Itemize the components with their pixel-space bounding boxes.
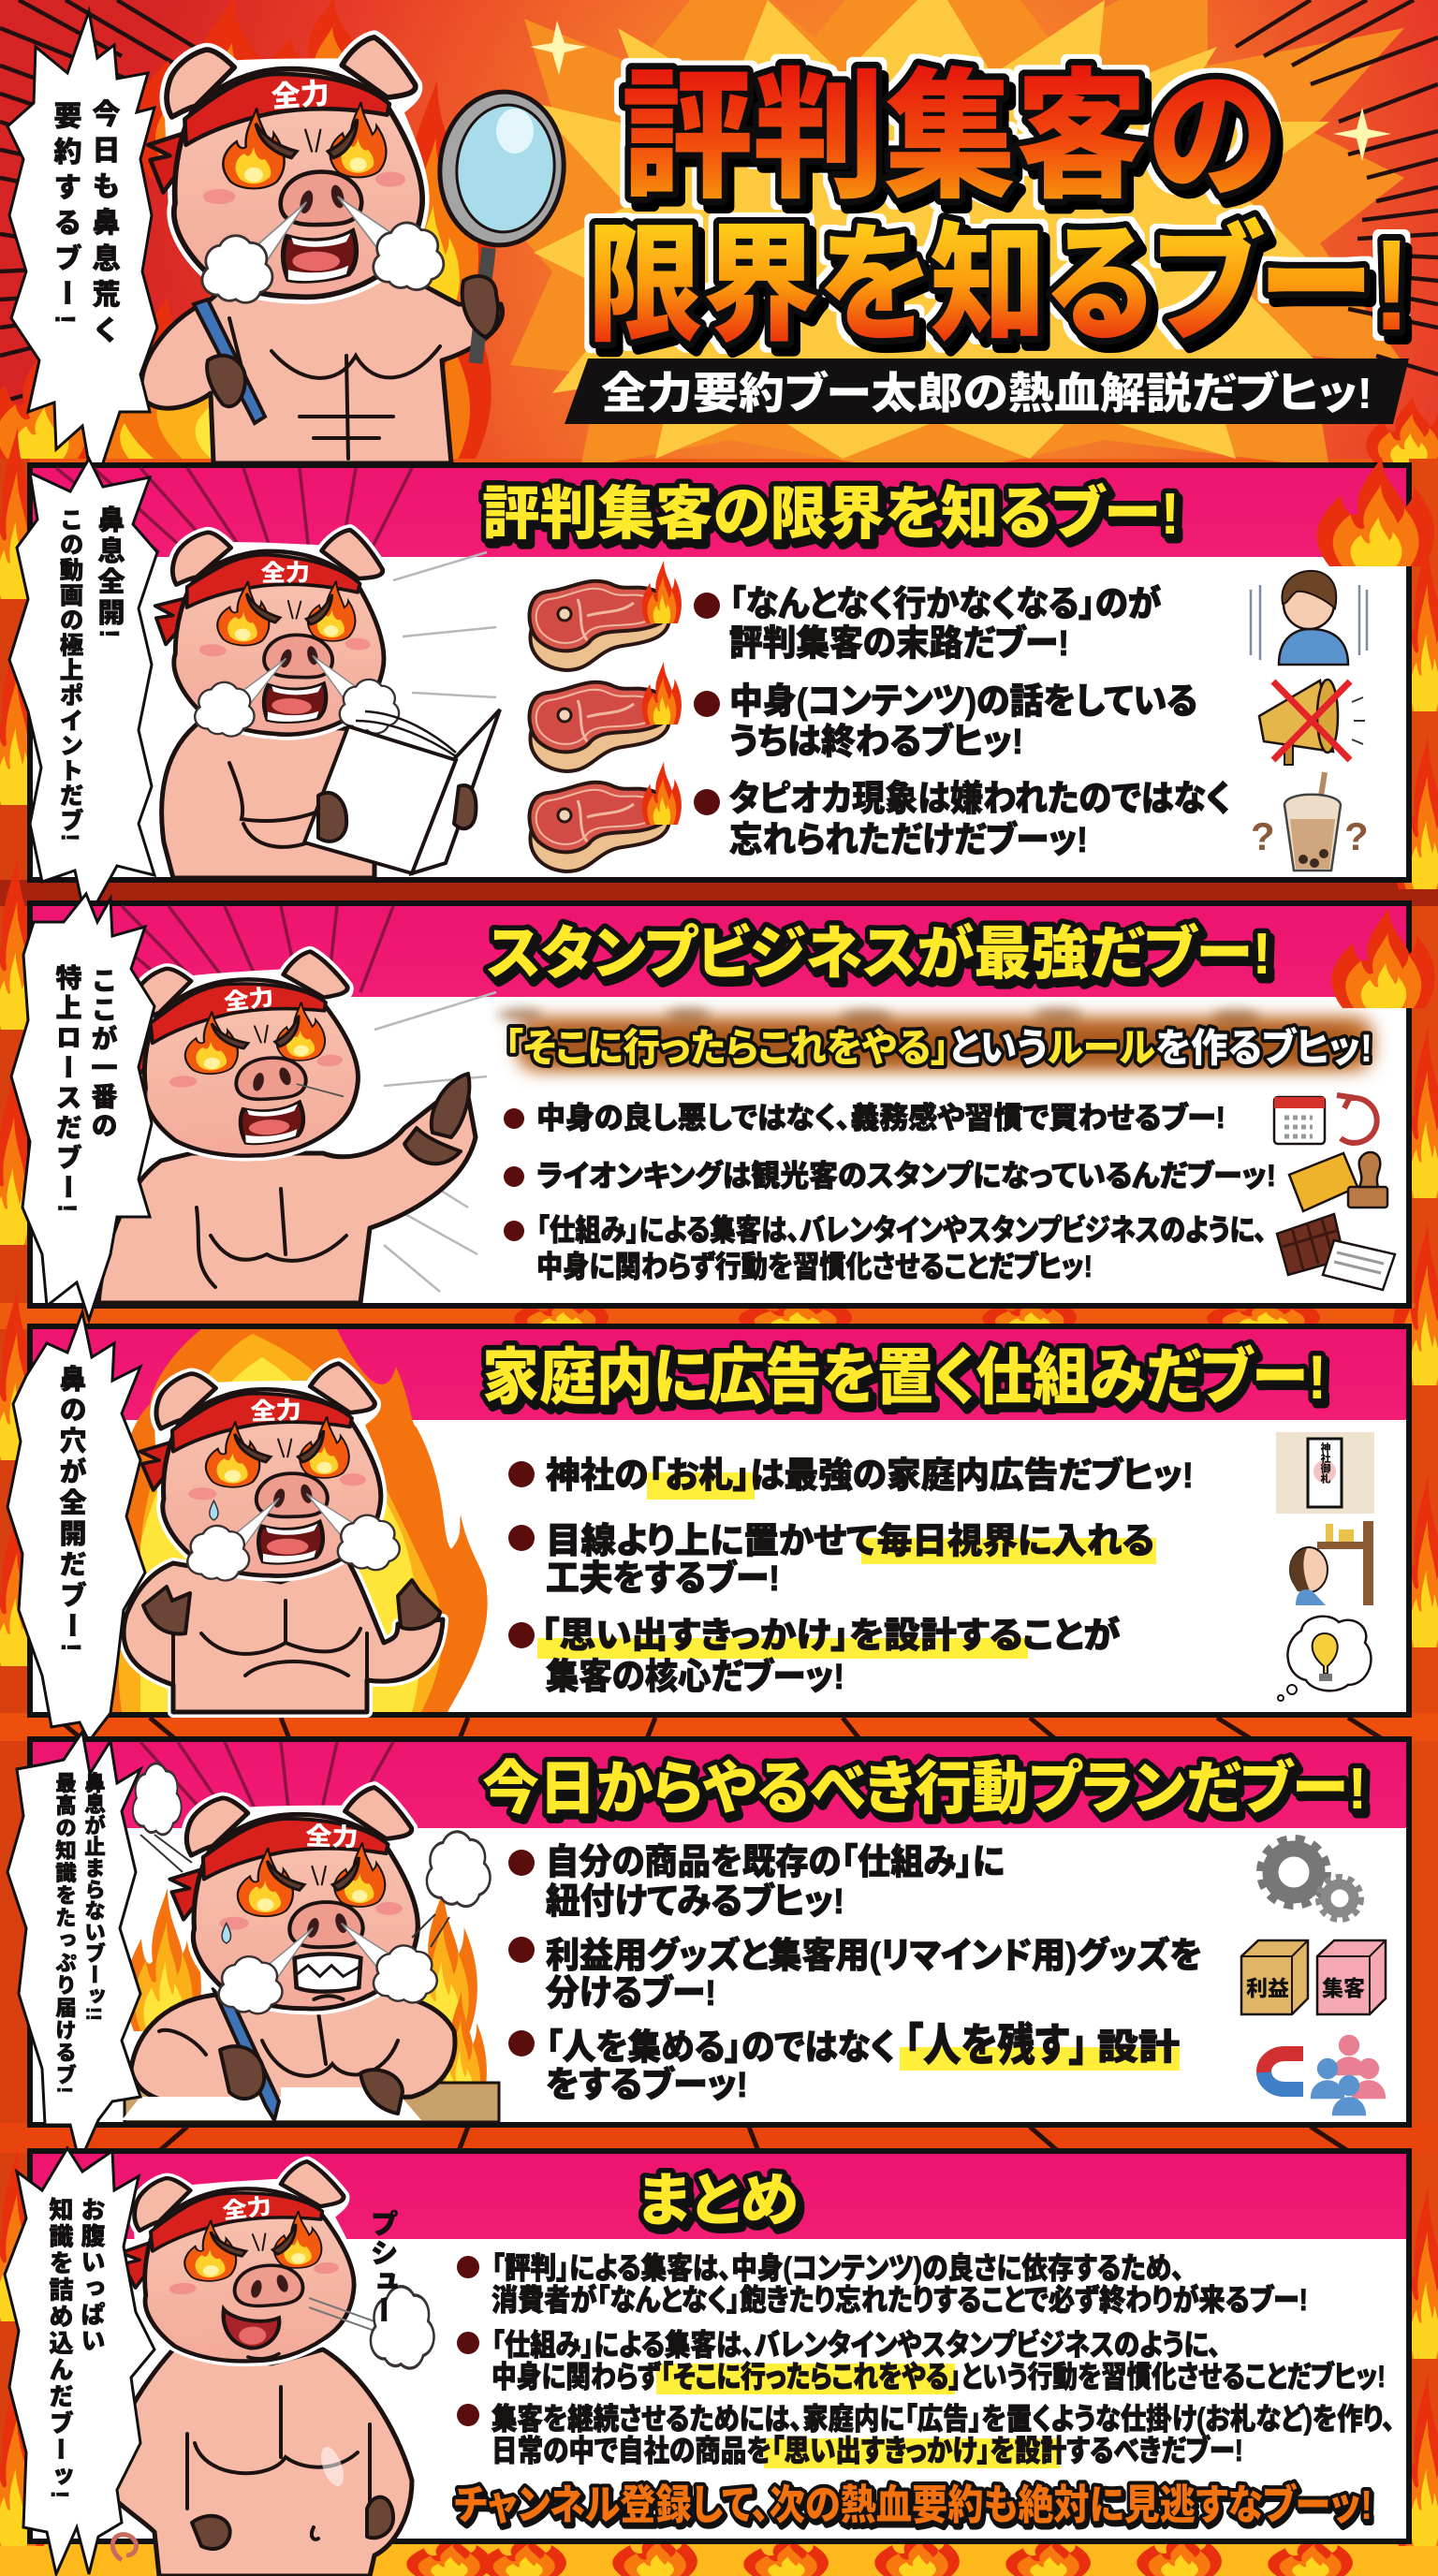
corner flame <box>1317 457 1434 566</box>
speech bubble: panel 4: 最高の知識をたっぷり届けるブ! <box>52 1772 77 2095</box>
bullet list <box>457 2251 1395 2468</box>
bullet list: 評判集客の末路だブー! <box>729 623 1069 664</box>
pig with full belly: 全力 <box>221 2194 273 2224</box>
panel 3: 家庭内広告 <box>30 1326 1409 1715</box>
pen <box>194 300 265 423</box>
speech bubble: panel 2: ここが一番の <box>88 967 118 1141</box>
bullet list: 利益用グッズと集客用(リマインド用)グッズを <box>546 1936 1202 1976</box>
bullet list: 「思い出すきっかけ」を設計することが <box>541 1616 1120 1656</box>
bullet list: 日常の中で自社の商品を「思い出すきっかけ」を設計するべきだブー! <box>492 2434 1243 2467</box>
icon: crossed megaphone <box>1259 680 1365 765</box>
bullet list: 消費者が「なんとなく」飽きたり忘れたりすることで必ず終わりが来るブー! <box>492 2283 1308 2317</box>
bullet list: うちは終わるブヒッ! <box>729 722 1023 762</box>
bullet list: 「仕組み」による集客は、バレンタインやスタンプビジネスのように、 <box>492 2328 1221 2362</box>
steak bullets <box>530 561 682 871</box>
bullet list <box>508 1843 1202 2105</box>
angry pig: 全力 <box>250 1397 302 1426</box>
speech bubble: panel 5: お腹いっぱい <box>78 2197 106 2354</box>
bullet list: 紐付けてみるブヒッ! <box>546 1881 844 1922</box>
title <box>587 58 1411 358</box>
corner flame <box>1331 908 1435 1008</box>
bullet list: 設計 <box>1097 2028 1180 2068</box>
bullet list: 自分の商品を既存の「仕組み」に <box>546 1843 1005 1882</box>
speech bubble: panel 1 <box>9 459 157 922</box>
icon: sad person <box>1251 571 1367 665</box>
bullet list: をするブーッ! <box>546 2065 748 2105</box>
bullet list: 中身(コンテンツ)の話をしている <box>729 682 1197 722</box>
bullet list: 目線より上に置かせて毎日視界に入れる <box>546 1522 1154 1561</box>
speech bubble: header: 今日も鼻息荒く <box>88 99 120 352</box>
speech bubble: header: 要約するブー! <box>49 101 82 331</box>
bullet list <box>504 1101 1276 1283</box>
bullet list: タピオカ現象は嫌われたのではなく <box>729 780 1230 819</box>
magnifying glass <box>433 87 570 363</box>
book <box>304 710 500 873</box>
bullet list: 集客の核心だブーッ! <box>546 1657 844 1697</box>
speech bubble: panel 2 <box>11 894 154 1320</box>
icon: bubble tea: ? <box>1344 814 1369 858</box>
header pig mascot with magnifier and pen: 全力 <box>271 77 330 113</box>
icon: magnet and people <box>1264 2035 1386 2115</box>
header pig mascot with magnifier and pen <box>141 37 570 463</box>
subtitle banner <box>565 359 1409 424</box>
icon: bubble tea <box>1251 772 1369 871</box>
bullet list: 「なんとなく行かなくなる」のが <box>729 584 1161 624</box>
bullet list: 「人を集める」のではなく <box>546 2028 895 2068</box>
icon: ticket and stamp <box>1289 1152 1387 1211</box>
bullet list: ライオンキングは観光客のスタンプになっているんだブーッ! <box>536 1159 1276 1193</box>
panel 1: 評判集客の限界 <box>30 457 1434 880</box>
speech bubble: panel 1: この動画の極上ポイントだブ! <box>56 507 83 842</box>
speech bubble: panel 2: 特上ロースだブー! <box>52 964 82 1216</box>
pig reading a book: 全力 <box>260 561 310 587</box>
icon: person looking up at shelf <box>1290 1521 1373 1605</box>
プシュー label: プシュー <box>365 2209 397 2325</box>
pen <box>213 1984 279 2120</box>
icon: ofuda: 神社御札 <box>1319 1442 1331 1485</box>
icon: bubble tea: ? <box>1251 814 1275 858</box>
icon: lightbulb thought <box>1278 1617 1371 1701</box>
bullet list: 神社の「お札」は最強の家庭内広告だブヒッ! <box>546 1456 1194 1496</box>
bullet list: 工夫をするブー! <box>546 1559 780 1599</box>
icon: boxes: 利益 <box>1246 1976 1289 2000</box>
background flames: header <box>0 0 1438 463</box>
bullet list <box>694 584 1230 860</box>
icon: boxes: 集客 <box>1322 1976 1365 2000</box>
speech bubble: panel 3 <box>7 1312 145 1741</box>
pig with full belly <box>101 2159 434 2576</box>
panel 2: スタンプビジネス <box>30 903 1435 1306</box>
subtitle banner: 全力要約ブー太郎の熱血解説だブヒッ! <box>601 369 1372 417</box>
pig at desk: 全力 <box>305 1822 359 1852</box>
bullet list: 中身に関わらず行動を習慣化させることだブヒッ! <box>536 1250 1093 1283</box>
speech bubble: panel 4 <box>7 1732 140 2162</box>
pig pointing <box>98 949 476 1303</box>
speech bubble: panel 5: 知識を詰め込んだブーッ! <box>46 2197 74 2501</box>
burnt banner: 「そこに行ったらこれをやる」というルールを作るブヒッ! <box>505 1026 1372 1070</box>
burnt banner <box>497 1008 1373 1071</box>
bullet list: 「仕組み」による集客は、バレンタインやスタンプビジネスのように、 <box>536 1213 1267 1247</box>
bullet list: 中身の良し悪しではなく、義務感や習慣で買わせるブー! <box>536 1101 1225 1134</box>
heading: スタンプビジネスが最強だブー! <box>487 921 1271 987</box>
speech bubble: panel 1: 鼻息全開! <box>94 505 125 642</box>
icon: ofuda <box>1276 1432 1374 1514</box>
speech bubble: panel 3: 鼻の穴が全開だブー! <box>55 1365 86 1656</box>
heading: 今日からやるべき行動プランだブー! <box>482 1756 1367 1822</box>
panel 5: まとめ <box>30 2151 1409 2576</box>
speech bubble: panel 4: 鼻息が止まらないブーッ!! <box>82 1771 106 2021</box>
pig at desk <box>122 1764 499 2122</box>
angry pig <box>124 1364 443 1712</box>
flames behind pig <box>93 1329 488 1712</box>
heading: 家庭内に広告を置く仕組みだブー! <box>482 1342 1327 1412</box>
pig pointing: 全力 <box>223 985 275 1016</box>
anger clouds <box>133 1764 491 1947</box>
bullet list: 忘れられただけだブーッ! <box>729 820 1088 860</box>
icon: calendar and loop <box>1274 1095 1377 1144</box>
icon: gears <box>1260 1838 1361 1920</box>
heading: 評判集客の限界を知るブー! <box>482 481 1180 547</box>
pig reading a book <box>149 520 500 878</box>
speech bubble: header <box>7 11 157 491</box>
bullet list: 分けるブー! <box>546 1973 716 2013</box>
title: 評判集客の <box>622 58 1277 215</box>
speech bubble: panel 5 <box>5 2148 154 2574</box>
bullet list <box>508 1456 1194 1697</box>
bullet list: 「人を残す」 <box>904 2021 1088 2071</box>
bullet list: 「評判」による集客は、中身(コンテンツ)の良さに依存するため、 <box>492 2251 1184 2285</box>
panel 4: 行動プラン <box>30 1739 1409 2125</box>
puff cloud <box>309 2287 434 2368</box>
icon: boxes <box>1241 1940 1386 2014</box>
icon: chocolate and flyer <box>1277 1214 1395 1290</box>
heading: まとめ <box>638 2169 799 2233</box>
